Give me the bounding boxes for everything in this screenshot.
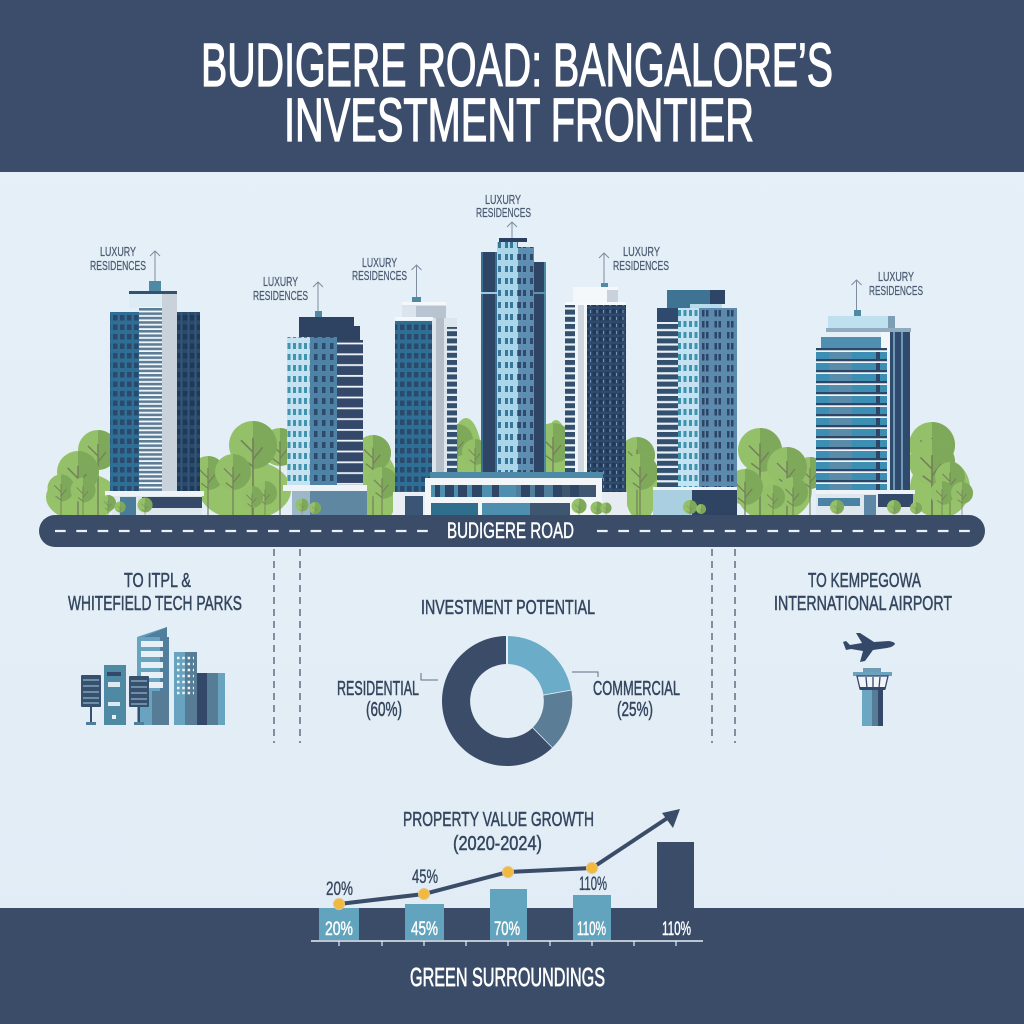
icon: tech park buildings xyxy=(81,627,225,725)
label: tech parks: WHITEFIELD TECH PARKS xyxy=(68,593,242,615)
road xyxy=(39,515,985,547)
label: tech parks xyxy=(68,570,242,615)
luxury residences labels with arrows: LUXURY xyxy=(878,269,914,284)
luxury residences labels with arrows: RESIDENCES xyxy=(352,268,407,283)
bar and line chart: 20% xyxy=(325,919,353,940)
chart title: PROPERTY VALUE GROWTH xyxy=(403,809,594,831)
luxury residences labels with arrows: RESIDENCES xyxy=(476,205,531,220)
building 5 xyxy=(565,283,626,495)
trees behind buildings xyxy=(46,418,970,515)
dashed dividers xyxy=(274,549,735,743)
luxury residences labels with arrows xyxy=(90,192,923,311)
front small trees xyxy=(48,474,973,515)
bar and line chart: 110% xyxy=(577,919,606,940)
donut label: commercial: COMMERCIAL xyxy=(593,678,680,700)
title: INVESTMENT FRONTIER xyxy=(284,86,754,154)
luxury residences labels with arrows: LUXURY xyxy=(623,244,660,259)
luxury residences labels with arrows: LUXURY xyxy=(485,192,521,207)
donut label: commercial xyxy=(572,672,680,721)
chart title xyxy=(403,809,594,855)
label: airport: INTERNATIONAL AIRPORT xyxy=(774,593,952,615)
bar and line chart: 45% xyxy=(411,919,438,940)
donut label: residential: RESIDENTIAL xyxy=(337,678,419,700)
donut chart xyxy=(442,636,572,766)
bar and line chart: 20% xyxy=(326,879,353,900)
donut label: residential: (60%) xyxy=(366,699,402,721)
footer label: GREEN SURROUNDINGS xyxy=(410,962,605,992)
luxury residences labels with arrows: LUXURY xyxy=(100,244,136,259)
luxury residences labels with arrows: LUXURY xyxy=(263,274,298,289)
donut label: residential xyxy=(337,673,438,721)
building 4: central tower xyxy=(481,238,546,484)
luxury residences labels with arrows: LUXURY xyxy=(362,255,397,270)
luxury residences labels with arrows: RESIDENCES xyxy=(253,288,308,303)
bar and line chart: 45% xyxy=(412,867,438,888)
building 3 xyxy=(393,297,457,515)
bar and line chart: 70% xyxy=(494,919,520,940)
luxury residences labels with arrows: RESIDENCES xyxy=(869,283,923,298)
heading: investment potential: INVESTMENT POTENTIAL xyxy=(421,597,595,619)
road: BUDIGERE ROAD xyxy=(447,518,574,543)
donut label: commercial: (25%) xyxy=(617,699,653,721)
building 1 xyxy=(105,281,204,515)
luxury residences labels with arrows: RESIDENCES xyxy=(90,258,146,273)
title xyxy=(201,31,833,154)
central podium xyxy=(425,472,627,515)
bar and line chart xyxy=(311,809,703,946)
icon: control tower xyxy=(853,668,892,726)
bar and line chart: 110% xyxy=(662,919,691,940)
chart title: (2020-2024) xyxy=(453,833,542,855)
icon: airplane xyxy=(843,633,895,662)
building 6 xyxy=(653,290,737,515)
footer band xyxy=(0,908,1024,1024)
label: tech parks: TO ITPL & xyxy=(124,570,191,592)
building 2 xyxy=(283,311,367,515)
luxury residences labels with arrows: RESIDENCES xyxy=(613,258,669,273)
building 7 xyxy=(816,310,915,515)
bar and line chart: 110% xyxy=(579,874,607,895)
label: airport: TO KEMPEGOWA xyxy=(808,570,921,592)
header band xyxy=(0,0,1024,172)
label: airport xyxy=(774,570,952,615)
